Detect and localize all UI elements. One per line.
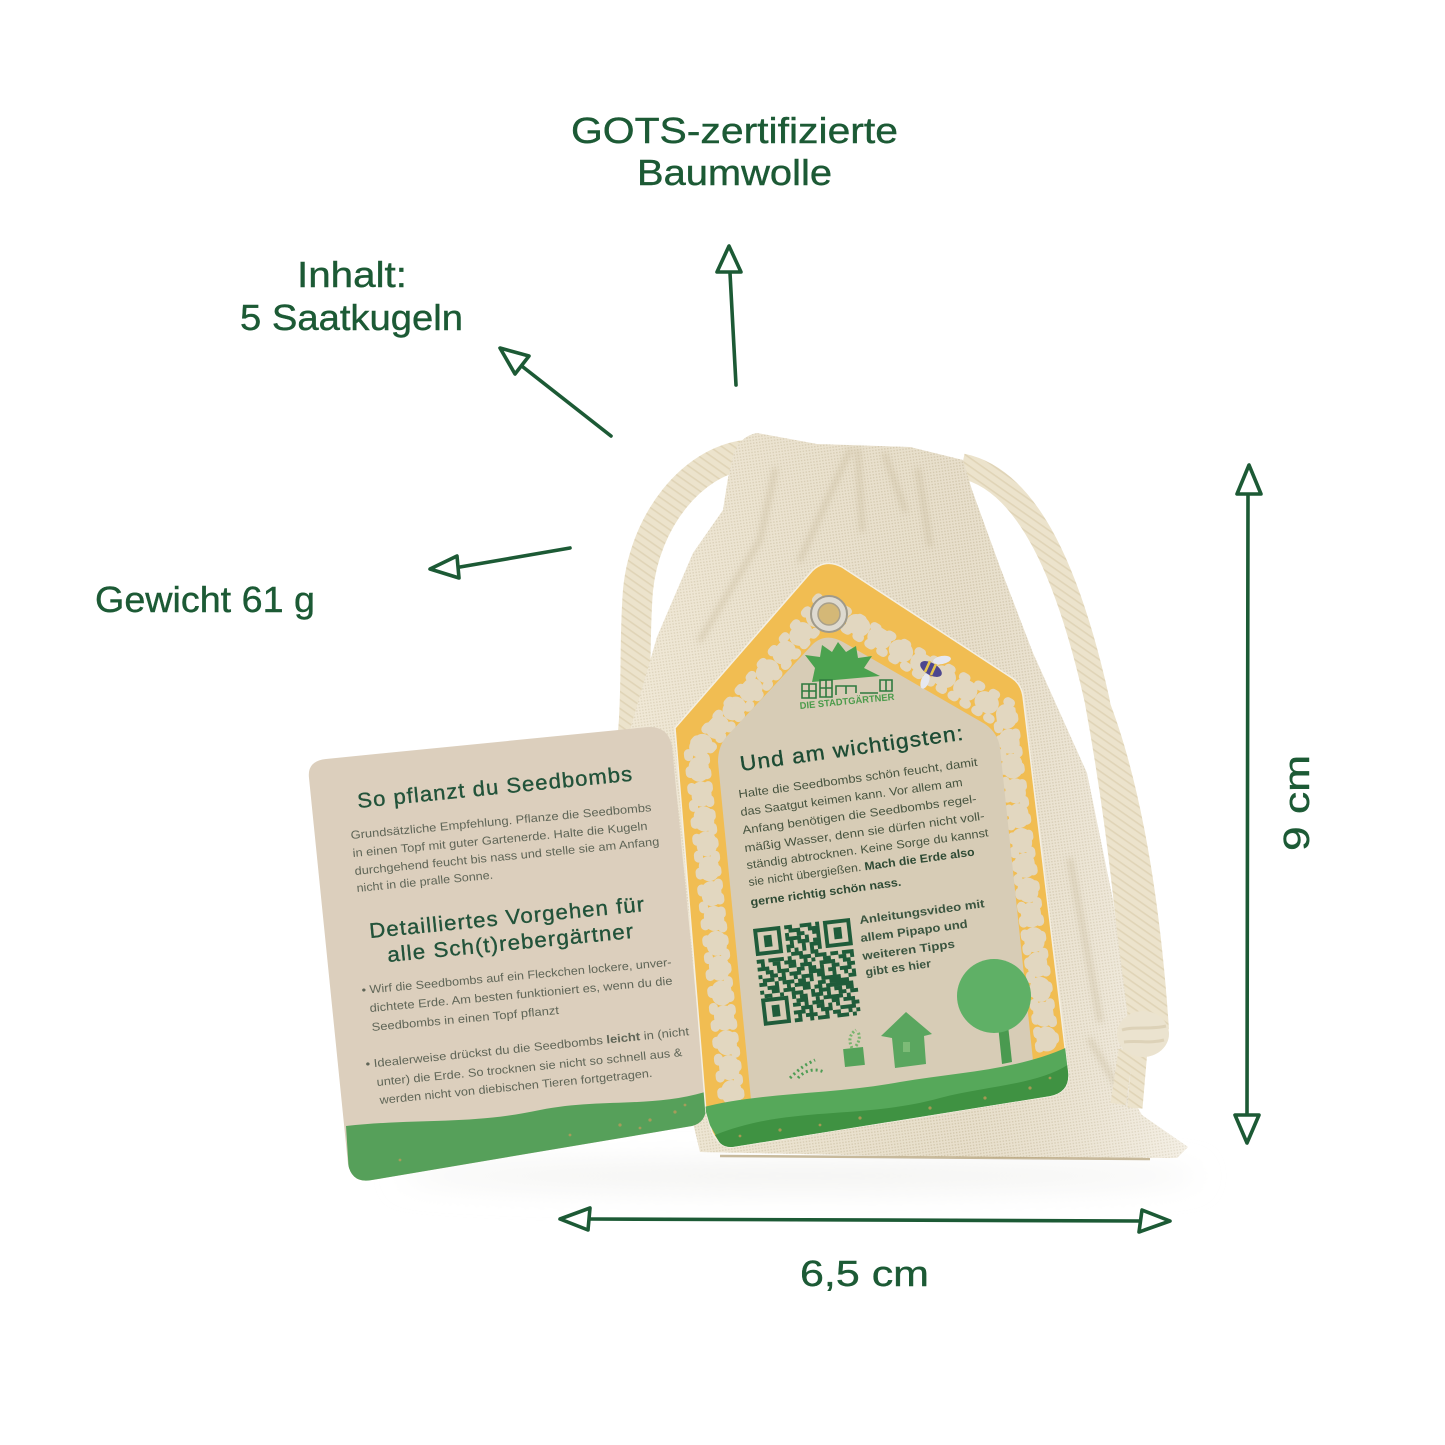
label: GOTS-zertifizierte Baumwolle: [571, 110, 898, 193]
logo: DIE STADTGÄRTNER: [799, 692, 895, 712]
sub heading: [368, 893, 646, 967]
bee: [918, 654, 952, 690]
body text: [738, 757, 990, 909]
eyelet: [811, 596, 847, 632]
product: cotton bag: [630, 433, 1188, 1159]
knot and cord tails: [1117, 1011, 1169, 1108]
body text: sie nicht übergießen. Mach die Erde also: [748, 847, 975, 889]
label: Inhalt 5 Saatkugeln: Inhalt:: [297, 254, 407, 295]
body text: mäßig Wasser, denn sie dürfen nicht voll-: [744, 811, 985, 855]
QR code: [753, 920, 861, 1024]
arrow: top: [717, 246, 741, 385]
body text: gerne richtig schön nass.: [750, 877, 902, 909]
body text: Halte die Seedbombs schön feucht, damit: [738, 757, 979, 801]
bullet list: Seedbombs in einen Topf pflanzt: [371, 1005, 560, 1034]
house: [881, 1012, 932, 1068]
QR caption: [859, 898, 985, 979]
bullet list: dichtete Erde. Am besten funktioniert es, wenn du die: [369, 975, 673, 1015]
QR caption: allem Pipapo und: [860, 919, 968, 945]
left cord: [633, 455, 745, 732]
QR caption: gibt es hier: [865, 958, 932, 979]
body text: ständig abtrocknen. Keine Sorge du kannst: [746, 827, 990, 872]
intro text: Grundsätzliche Empfehlung. Pflanze die Seedbombs: [350, 802, 652, 842]
dimension label: 6,5 cm: 6,5 cm: [800, 1253, 929, 1294]
body text: Anfang benötigen die Seedbombs regel-: [742, 793, 977, 837]
bullet list: unter) die Erde. So trocknen sie nicht so schnell aus &: [376, 1047, 683, 1089]
floral border pattern: [688, 596, 1056, 1095]
tag inner panel: [718, 638, 1034, 1110]
dimension arrow: height: [1235, 465, 1261, 1143]
bag folds: [700, 450, 1125, 1100]
fold card: left panel: [309, 727, 712, 1190]
arrow: left: [430, 548, 570, 578]
intro text: [350, 802, 660, 895]
meadow speckles: [399, 1104, 686, 1161]
hang tag: right panel: [675, 563, 1080, 1160]
pot with plant: [790, 1030, 865, 1078]
intro text: nicht in die pralle Sonne.: [356, 870, 494, 895]
label: GOTS-zertifizierte Baumwolle: GOTS-zertifizierte: [571, 110, 898, 151]
label: Gewicht 61 g: Gewicht 61 g: [95, 579, 315, 620]
QR caption: Anleitungsvideo mit: [859, 898, 985, 927]
bag base shadow: [720, 1156, 1150, 1159]
arrow: diagonal: [500, 348, 611, 436]
floor shadow: [400, 1162, 1200, 1190]
intro text: in einen Topf mit guter Gartenerde. Halte die Kugeln: [352, 821, 648, 860]
heading: Und am wichtigsten:: [738, 722, 965, 776]
tag yellow base: [675, 563, 1068, 1147]
label: Inhalt 5 Saatkugeln: 5 Saatkugeln: [240, 297, 463, 338]
right cord strands: [962, 466, 1158, 1030]
logo: [799, 642, 895, 712]
label: GOTS-zertifizierte Baumwolle: Baumwolle: [637, 152, 832, 193]
card paper: [309, 727, 706, 1181]
meadow: [706, 1048, 1068, 1147]
tree: [957, 959, 1031, 1064]
body text: das Saatgut keimen kann. Vor allem am: [740, 777, 963, 819]
bullet list: • Idealerweise drückst du die Seedbombs leicht in (nicht: [365, 1026, 691, 1071]
QR caption: weiteren Tipps: [861, 939, 956, 963]
bullet list: [361, 957, 691, 1107]
bag body: [630, 433, 1188, 1158]
bullet list: werden nicht von diebischen Tieren fortgetragen.: [378, 1068, 653, 1107]
dimension arrow: width: [560, 1208, 1170, 1232]
sub heading: Detailliertes Vorgehen für: [368, 893, 646, 943]
heading: So pflanzt du Seedbombs: [356, 763, 634, 813]
sub heading: alle Sch(t)rebergärtner: [386, 920, 635, 967]
bullet list: • Wirf die Seedbombs auf ein Fleckchen lockere, unver-: [361, 957, 672, 997]
intro text: durchgehend feucht bis nass und stelle sie am Anfang: [354, 836, 660, 878]
label: Inhalt 5 Saatkugeln: [240, 254, 463, 338]
dimension label: 9 cm: 9 cm: [1276, 755, 1317, 851]
green meadow: [346, 1092, 706, 1181]
